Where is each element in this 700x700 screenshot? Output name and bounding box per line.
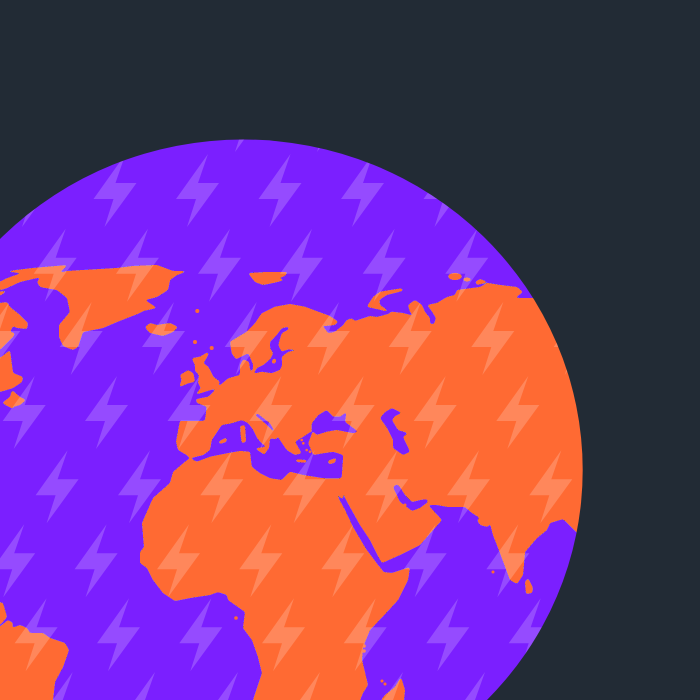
bolt row 0 — [235, 140, 320, 152]
Sri Lanka — [525, 578, 533, 594]
Sardinia and Corsica — [240, 425, 246, 443]
globe disc and contents — [0, 140, 583, 700]
Caspian Sea — [380, 408, 410, 455]
Ireland — [180, 370, 195, 386]
Great Britain — [192, 352, 220, 395]
Black Sea — [312, 410, 358, 435]
continents — [0, 265, 620, 700]
bolt row 7 — [15, 598, 552, 671]
South America — [0, 602, 69, 700]
Madagascar — [381, 677, 405, 700]
bolt row 2 — [34, 229, 488, 302]
Red Sea — [338, 495, 384, 572]
Persian Gulf — [393, 484, 428, 511]
Afro-Eurasia landmass — [140, 283, 620, 700]
Mediterranean Sea — [190, 413, 343, 480]
bolt row 8, cut by the frame — [53, 672, 485, 700]
Svalbard — [248, 272, 288, 285]
ocean and main landmasses — [0, 140, 583, 700]
bolt row 5 — [36, 450, 572, 523]
bolt row 4 — [3, 376, 539, 449]
small islands — [193, 309, 494, 686]
Crete — [295, 459, 307, 463]
bolt row 6 — [0, 524, 529, 597]
bolt row 3 — [0, 302, 597, 375]
Sicily — [255, 447, 267, 455]
inland seas — [190, 327, 428, 572]
ocean — [0, 140, 576, 700]
Novaya Zemlya — [367, 288, 403, 311]
Gotland — [272, 358, 276, 364]
Iceland — [145, 323, 178, 336]
Mediterranean and Baltic islands — [218, 358, 337, 464]
globe illustration — [0, 140, 583, 700]
lightning bolt pattern — [0, 140, 572, 700]
Canadian Arctic and North America — [0, 265, 68, 409]
Baltic Sea — [254, 327, 294, 373]
Greenland — [37, 265, 188, 350]
Balearic Islands — [219, 438, 227, 444]
Arctic islands — [448, 273, 488, 285]
Cyprus — [328, 458, 336, 464]
bolt row 1 — [22, 154, 449, 226]
